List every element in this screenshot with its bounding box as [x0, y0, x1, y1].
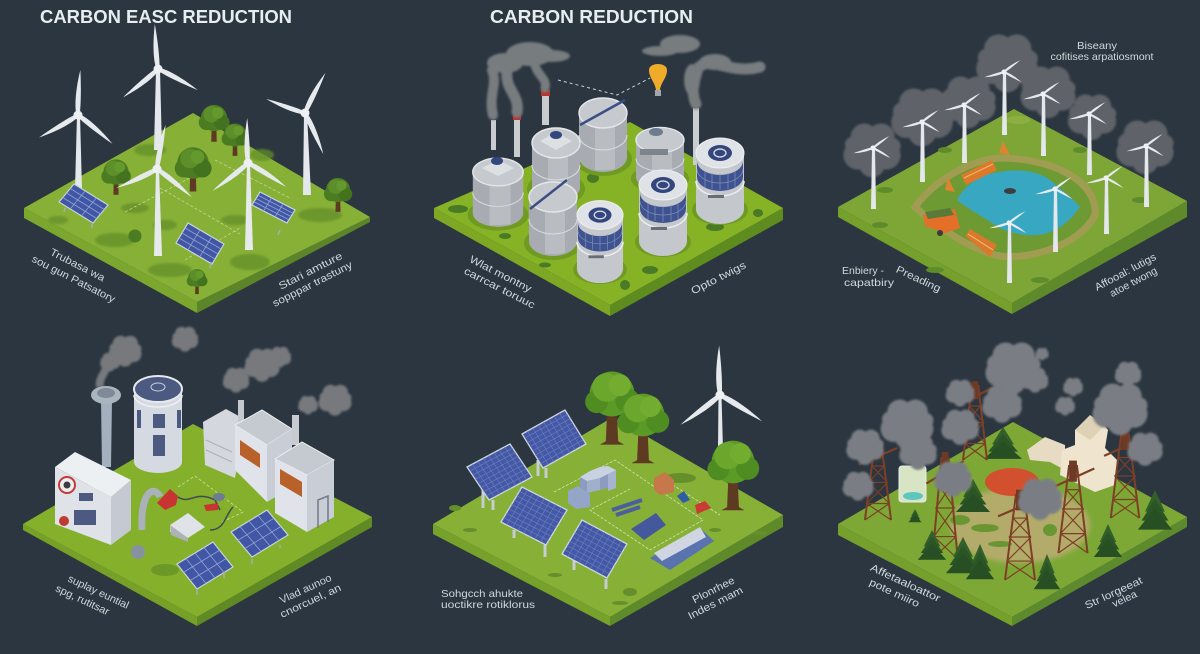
foreground pines — [918, 530, 1060, 589]
label: right — [271, 250, 355, 310]
title: carbon reduction: CARBON REDUCTION — [490, 7, 693, 27]
label: left: Preading — [894, 264, 943, 295]
solar arrays — [467, 410, 627, 589]
wind turbines — [853, 59, 1164, 283]
label: left: Trubasa wa — [48, 246, 107, 284]
label: left: sou gun Patsatory — [30, 253, 118, 306]
label: right: Str lorgeeat — [1083, 575, 1144, 612]
label: left: capatbiry — [844, 277, 895, 289]
platform — [434, 122, 783, 316]
label: left: spg, rutitsar — [53, 583, 112, 618]
factory buildings — [203, 400, 334, 532]
wind turbine 3 — [265, 71, 327, 195]
solar panels — [177, 510, 288, 595]
label: left: Enbiery - — [842, 265, 885, 277]
panel: wind and solar farm — [24, 7, 370, 313]
label: right: Plonrhee — [690, 574, 737, 606]
platform — [838, 109, 1187, 314]
battery and storage equipment — [568, 466, 714, 570]
label: right: Stari amture — [277, 250, 345, 293]
label: right: sopppar trastuny — [271, 259, 355, 310]
label: left — [441, 588, 535, 611]
red patch — [985, 468, 1039, 496]
label: right: Opto twigs — [689, 259, 748, 297]
pine trees — [908, 427, 1172, 557]
title: carbon east reduction: CARBON EASC REDUCTION — [40, 7, 292, 27]
smokestacks with smoke — [487, 35, 760, 165]
wind turbine 2 — [122, 24, 199, 150]
label: left: carrcar toruuc — [462, 265, 537, 311]
label: left: Sohgcch ahukte — [441, 588, 523, 600]
label: right — [278, 572, 343, 621]
cylindrical tower — [134, 376, 182, 473]
equipment — [131, 489, 233, 559]
beaker — [899, 466, 926, 502]
smoke clouds — [843, 342, 1163, 520]
label: left: pote miiro — [867, 576, 921, 610]
pond — [957, 170, 1080, 235]
label: left — [867, 562, 943, 610]
label: top: cofitises arpatiosmont — [1050, 51, 1154, 63]
tanks back row — [527, 98, 748, 225]
label: right — [686, 574, 745, 622]
label: left: uoctikre rotiklorus — [441, 599, 535, 611]
label: left — [462, 254, 537, 311]
label: left — [842, 264, 943, 295]
wind turbine 4 — [115, 124, 194, 256]
label: top: Biseany — [1077, 40, 1118, 52]
panel: solar field — [433, 345, 783, 626]
solar panels — [59, 184, 295, 268]
smoke clouds — [100, 327, 352, 416]
panel: industrial plant — [23, 327, 372, 626]
trees — [101, 105, 352, 294]
water tower — [91, 386, 121, 467]
wind turbine 5 — [211, 118, 288, 250]
label: right: Affooal: lutigs — [1093, 251, 1158, 294]
panel: pond with turbines — [838, 34, 1187, 314]
platform — [24, 113, 370, 313]
light bulb with dashed link — [558, 64, 667, 96]
cottage — [1027, 415, 1117, 492]
trees and wind turbine — [585, 345, 764, 510]
tanks front row — [468, 157, 691, 284]
smoke clouds — [843, 34, 1174, 177]
orange vehicles — [923, 141, 1016, 257]
label: right: Vlad aunoo — [278, 572, 334, 607]
platform — [433, 417, 783, 626]
panel: storage tanks — [434, 7, 783, 316]
label: right: Indes mam — [686, 584, 745, 622]
label: top — [1050, 40, 1154, 63]
label: right: atoe twong — [1108, 265, 1160, 300]
panel: forest with transmission towers — [838, 342, 1187, 626]
platform — [23, 424, 372, 626]
control building — [55, 452, 131, 545]
label: left: suplay euntial — [66, 573, 131, 612]
label: right: cnorcuel, an — [278, 582, 343, 621]
label: right: velea — [1110, 588, 1139, 610]
label: left — [53, 573, 131, 618]
transmission towers — [859, 381, 1146, 580]
wind turbine 1 — [38, 70, 115, 190]
label: left: Wlat montny — [467, 254, 534, 296]
platform — [838, 422, 1187, 626]
label: left: Affetaaloattor — [868, 562, 943, 605]
